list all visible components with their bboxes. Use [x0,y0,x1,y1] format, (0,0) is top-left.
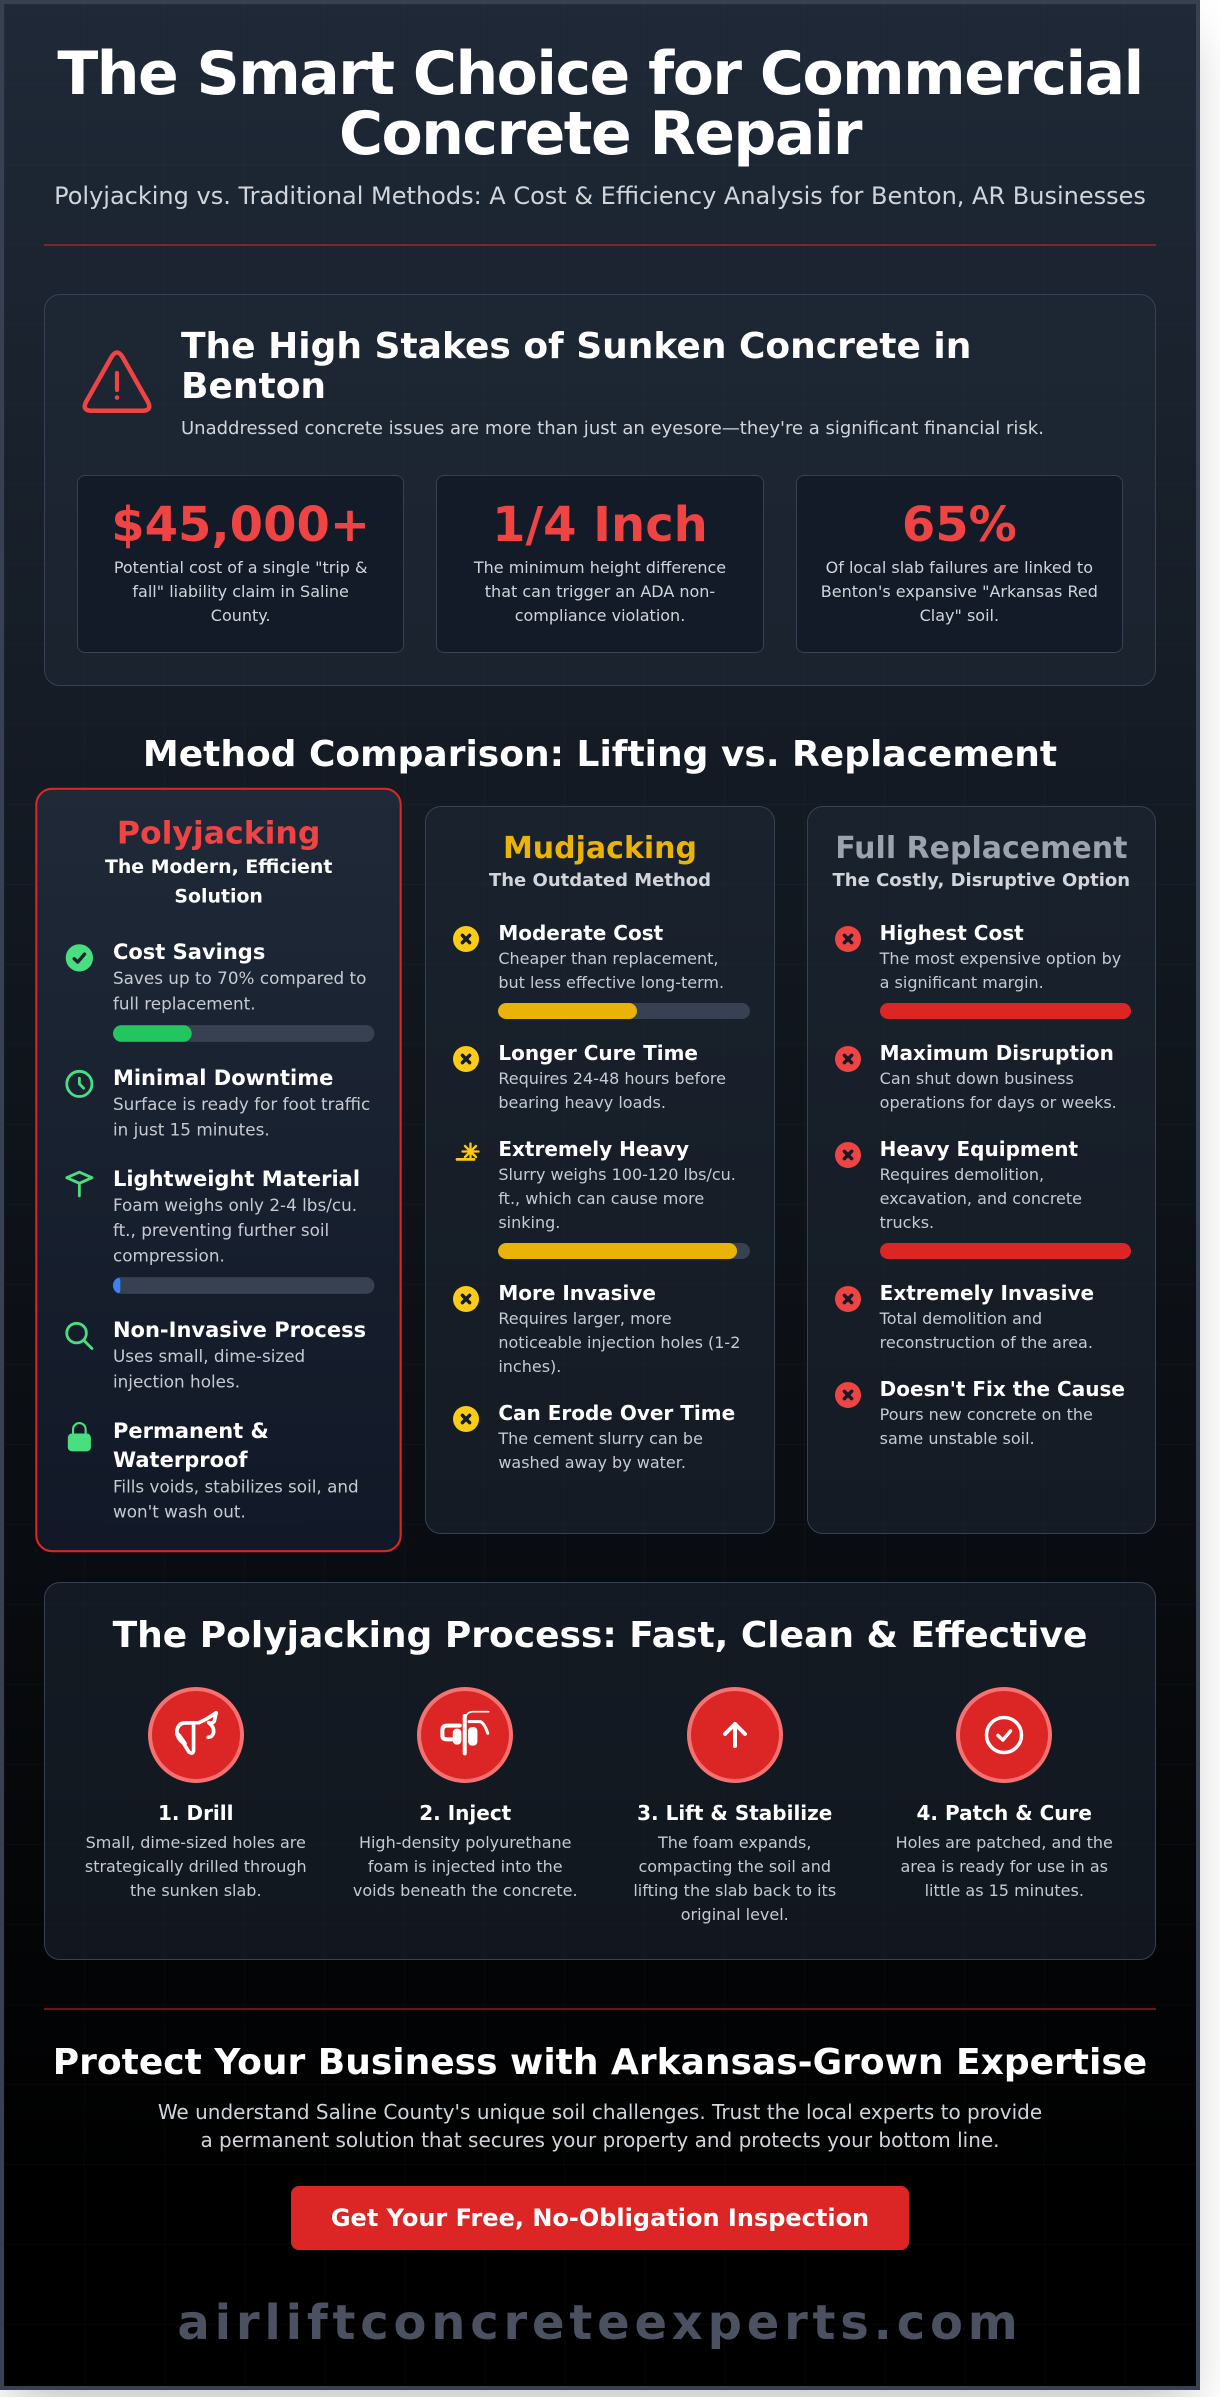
footer call to action [44,2008,1156,2347]
icon: check circle [956,1687,1052,1783]
step 2 title: 2. Inject [419,1801,511,1825]
stat: liability cost: $45,000+ [111,497,370,553]
icon: warning triangle [82,350,152,413]
item: permanent: Fills voids, stabilizes soil, and won't wash out. [113,1477,359,1522]
step 3: lift [616,1687,854,1927]
stakes text [181,326,1044,439]
stat: ADA height [436,475,764,653]
item: more invasive [453,1281,740,1376]
stakes intro: Unaddressed concrete issues are more than just an eyesore—they're a significant financial risk. [181,418,1044,439]
item: doesn't fix the cause: Pours new concrete on the same unstable soil. [880,1405,1093,1448]
step 4: patch [886,1687,1123,1927]
icon: drill [148,1687,244,1783]
footer text: We understand Saline County's unique soil challenges. Trust the local experts to provide [158,2100,1042,2124]
panel: full replacement [807,806,1156,1534]
CTA button [291,2186,909,2250]
icon: x circle [835,1046,861,1072]
stat: liability cost [77,475,404,653]
item: highest cost: Highest Cost [880,921,1024,945]
CTA button: Get Your Free, No-Obligation Inspection [331,2204,869,2232]
panel: high stakes [44,294,1156,686]
process steps [85,1687,1113,1924]
icon: x circle [835,1142,861,1168]
icon: lock [68,1422,91,1452]
item: non-invasive: Non-Invasive Process [113,1317,366,1342]
item: can erode: Can Erode Over Time [498,1401,735,1425]
stat cards [77,475,1123,653]
footer heading: Protect Your Business with Arkansas-Grown Expertise [53,2042,1147,2083]
icon: injector [417,1687,513,1783]
panel: polyjacking [35,788,402,1552]
item: non-invasive: Uses small, dime-sized injection holes. [113,1346,305,1392]
item: highest cost: The most expensive option by a significant margin. [880,949,1121,992]
item: lightweight material [65,1166,374,1294]
item: minimal downtime: Surface is ready for foot traffic in just 15 minutes. [113,1094,370,1140]
step 1: drill [85,1687,307,1900]
header [44,44,1156,246]
icon: magnifier [65,1322,94,1350]
item: can erode: The cement slurry can be washed away by water. [498,1429,703,1472]
item: more invasive: Requires larger, more noticeable injection holes (1-2 inches). [498,1309,740,1376]
step 3 title: 3. Lift & Stabilize [637,1801,832,1825]
panel: process [44,1582,1156,1960]
stat: soil failures: Of local slab failures are linked to Benton's expansive "Arkansas Red Clay" soil. [821,558,1098,625]
icon: up arrow [687,1687,783,1783]
item: extremely heavy: Extremely Heavy [498,1137,689,1161]
item: can erode [453,1401,735,1472]
item: heavy equipment [835,1137,1131,1259]
icon: x circle [453,1286,479,1312]
item: extremely heavy [456,1137,750,1259]
item: cost savings: Cost Savings [113,939,265,964]
item: doesn't fix the cause [835,1377,1125,1448]
full replacement heading [832,831,1130,891]
item: maximum disruption: Maximum Disruption [880,1041,1114,1065]
title: The Smart Choice for Commercial Concrete Repair [57,39,1143,169]
icon: x circle [453,926,479,952]
process heading: The Polyjacking Process: Fast, Clean & Effective [113,1615,1087,1656]
item: extremely invasive: Extremely Invasive [880,1281,1094,1305]
item: highest cost [835,921,1131,1019]
stat: ADA height: The minimum height difference that can trigger an ADA non-compliance violation. [474,558,726,625]
item: longer cure time [453,1041,726,1112]
item: longer cure time: Requires 24-48 hours before bearing heavy loads. [498,1069,726,1112]
icon: x circle [835,1286,861,1312]
polyjacking heading [105,815,332,908]
item: non-invasive [65,1317,366,1392]
item: heavy equipment: Heavy Equipment [880,1137,1078,1161]
step 2 text: High-density polyurethane foam is injected into the voids beneath the concrete. [353,1833,578,1900]
item: permanent: Permanent & Waterproof [113,1418,269,1472]
subtitle: Polyjacking vs. Traditional Methods: A Cost & Efficiency Analysis for Benton, AR Businesses [54,182,1146,210]
icon: clock [65,1070,94,1098]
item: lightweight material: Foam weighs only 2-4 lbs/cu. ft., preventing further soil compression. [113,1195,357,1266]
icon: x circle [835,926,861,952]
item: heavy equipment: Requires demolition, excavation, and concrete trucks. [880,1165,1082,1232]
step 4 title: 4. Patch & Cure [917,1801,1092,1825]
step 1 text: Small, dime-sized holes are strategically drilled through the sunken slab. [85,1833,307,1900]
item: more invasive: More Invasive [498,1281,656,1305]
item: permanent [68,1418,359,1522]
item: extremely invasive: Total demolition and reconstruction of the area. [880,1309,1093,1352]
icon: lightweight stem [65,1170,94,1198]
step 3 text: The foam expands, compacting the soil and lifting the slab back to its original level. [633,1833,836,1924]
item: minimal downtime [65,1065,370,1140]
item: doesn't fix the cause: Doesn't Fix the Cause [880,1377,1125,1401]
item: moderate cost [453,921,750,1019]
mudjacking heading: Mudjacking [503,831,697,866]
stat: soil failures: 65% [902,497,1017,553]
item: extremely invasive [835,1281,1094,1352]
item: cost savings [66,939,374,1042]
step 4 text: Holes are patched, and the area is ready for use in as little as 15 minutes. [896,1833,1113,1900]
item: minimal downtime: Minimal Downtime [113,1065,333,1090]
step 1 title: 1. Drill [158,1801,234,1825]
polyjacking heading: The Modern, Efficient Solution [105,856,332,908]
icon: x circle [835,1382,861,1408]
item: maximum disruption [835,1041,1117,1112]
item: extremely heavy: Slurry weighs 100-120 lbs/cu. ft., which can cause more sinking. [498,1165,736,1232]
item: lightweight material: Lightweight Material [113,1166,360,1191]
stakes heading row [82,326,1044,439]
stat: ADA height: 1/4 Inch [492,497,708,553]
mudjacking heading [489,831,711,891]
mudjacking heading: The Outdated Method [489,870,711,891]
comparison columns [35,788,1156,1552]
icon: x circle [453,1406,479,1432]
full replacement heading: Full Replacement [835,831,1127,866]
polyjacking heading: Polyjacking [117,815,320,852]
icon: heavy burst [456,1142,480,1161]
icon: check circle [66,944,93,972]
comparison heading: Method Comparison: Lifting vs. Replacement [143,734,1057,775]
item: moderate cost: Cheaper than replacement, but less effective long-term. [498,949,724,992]
step 2: inject [346,1687,584,1927]
item: moderate cost: Moderate Cost [498,921,663,945]
stat: soil failures [796,475,1123,653]
website: airliftconcreteexperts.com [177,2295,1023,2351]
panel: mudjacking [425,806,775,1534]
icon: x circle [453,1046,479,1072]
item: maximum disruption: Can shut down business operations for days or weeks. [880,1069,1117,1112]
stakes heading: The High Stakes of Sunken Concrete in Benton [181,326,971,407]
footer text: a permanent solution that secures your property and protects your bottom line. [200,2128,1000,2152]
full replacement heading: The Costly, Disruptive Option [833,870,1130,891]
stat: liability cost: Potential cost of a single "trip & fall" liability claim in Saline County. [114,558,368,625]
item: cost savings: Saves up to 70% compared to full replacement. [113,968,366,1014]
footer text [44,2098,1156,2154]
item: longer cure time: Longer Cure Time [498,1041,698,1065]
